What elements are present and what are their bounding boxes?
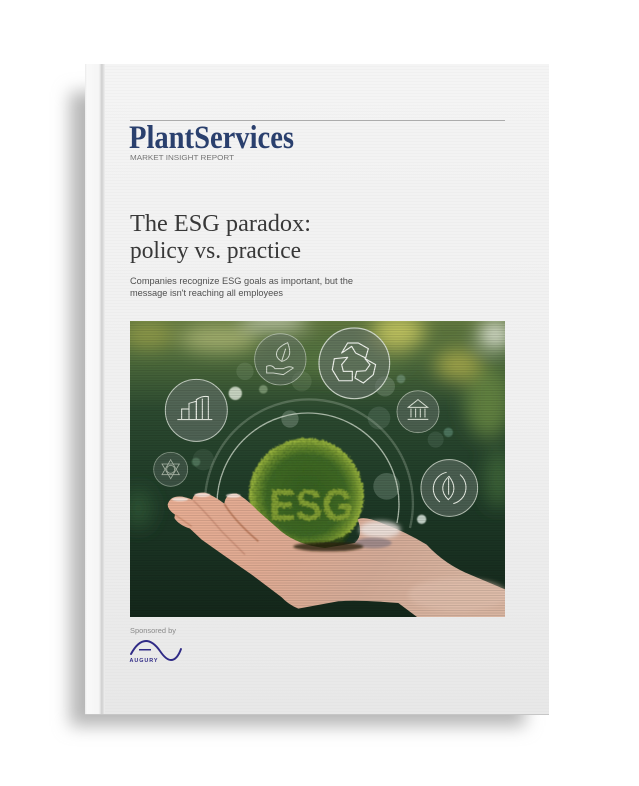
- open hand: [168, 493, 508, 618]
- book shadow: [70, 92, 525, 726]
- subtitle: Companies recognize ESG goals as important, but the: [130, 275, 353, 286]
- glass rings: [205, 399, 413, 528]
- report label: MARKET INSIGHT REPORT: [130, 153, 235, 162]
- icon: bank: [397, 391, 439, 433]
- icon: bar chart: [165, 379, 227, 441]
- scanline texture: [130, 321, 505, 617]
- title: [130, 210, 311, 264]
- book cover: [85, 64, 549, 715]
- masthead rule: [130, 120, 505, 121]
- logo: Plant Services: PlantServices: [129, 120, 294, 156]
- cover photo: hand holding moss ESG ball: [122, 314, 512, 618]
- bokeh background: [122, 314, 512, 528]
- subtitle: message isn't reaching all employees: [130, 287, 283, 298]
- title: policy vs. practice: [130, 237, 301, 264]
- subtitle: [130, 275, 353, 298]
- spine: [85, 64, 105, 715]
- icon: hand and leaf: [255, 334, 306, 385]
- moss ball with ESG lettering: ESG: [269, 482, 353, 530]
- sponsor logo: Augury: [130, 641, 181, 664]
- title: The ESG paradox:: [130, 210, 311, 237]
- bokeh dots: [192, 363, 453, 524]
- icon: recycle: [319, 328, 390, 399]
- moss ball with ESG lettering: [249, 438, 364, 553]
- sponsor logo: Augury: AUGURY: [130, 658, 158, 664]
- icon: leaf cycle: [421, 460, 478, 516]
- icon: people network: [154, 452, 188, 486]
- sponsored by label: Sponsored by: [130, 626, 176, 635]
